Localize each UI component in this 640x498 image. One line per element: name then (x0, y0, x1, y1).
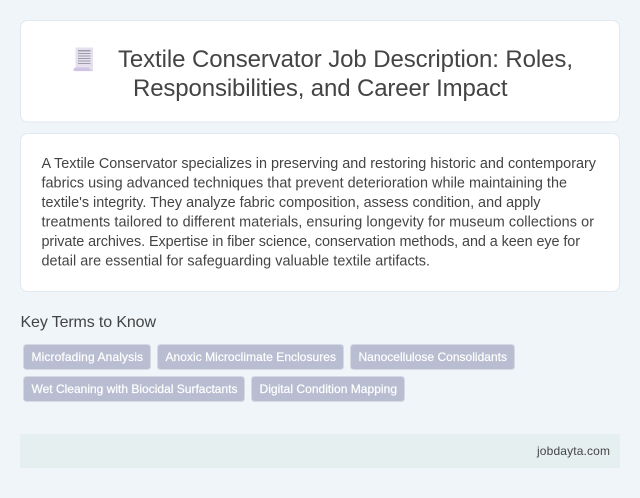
panel: description card (20, 134, 620, 292)
tag: Nanocellulose Consolidants: Nanocellulose Consolidants (358, 350, 507, 364)
footer text: source: jobdayta.com (536, 444, 610, 458)
text block: description: treatments tailored to different materials, ensuring longevity for museum collections or (42, 214, 594, 230)
tag: Wet Cleaning with Biocidal Surfactants (24, 376, 244, 402)
text block: description: fabrics using advanced techniques that prevent deterioration while maintaining the (42, 176, 567, 192)
panel: key term tags (24, 344, 514, 402)
tag: Nanocellulose Consolidants (350, 344, 514, 370)
text block: description: A Textile Conservator specializes in preserving and restoring historic and contemporary (42, 156, 597, 172)
tag: Digital Condition Mapping (252, 376, 404, 402)
text block: description (42, 156, 597, 270)
text block: description: private archives. Expertise in fiber science, conservation methods, and a keen eye for (42, 234, 580, 250)
icon: document scroll (74, 48, 93, 71)
tag: Microfading Analysis: Microfading Analysis (32, 350, 143, 364)
tag: Anoxic Microclimate Enclosures (158, 344, 344, 370)
heading: key terms: Key Terms to Know (20, 314, 156, 331)
text block: description: detail are essential for safeguarding valuable textile artifacts. (42, 254, 430, 270)
footer bar (20, 434, 620, 468)
tag: Microfading Analysis (24, 344, 150, 370)
tag: Wet Cleaning with Biocidal Surfactants: Wet Cleaning with Biocidal Surfactants (32, 382, 238, 396)
text block: description: textile's integrity. They analyze fabric composition, assess condition, and apply (42, 195, 541, 211)
title: Textile Conservator Job Description: Roles, (118, 46, 573, 73)
panel: header card (20, 20, 620, 122)
title (118, 46, 573, 102)
title: Responsibilities, and Career Impact (133, 75, 508, 102)
tag: Digital Condition Mapping: Digital Condition Mapping (260, 382, 397, 396)
tag: Anoxic Microclimate Enclosures: Anoxic Microclimate Enclosures (166, 350, 336, 364)
